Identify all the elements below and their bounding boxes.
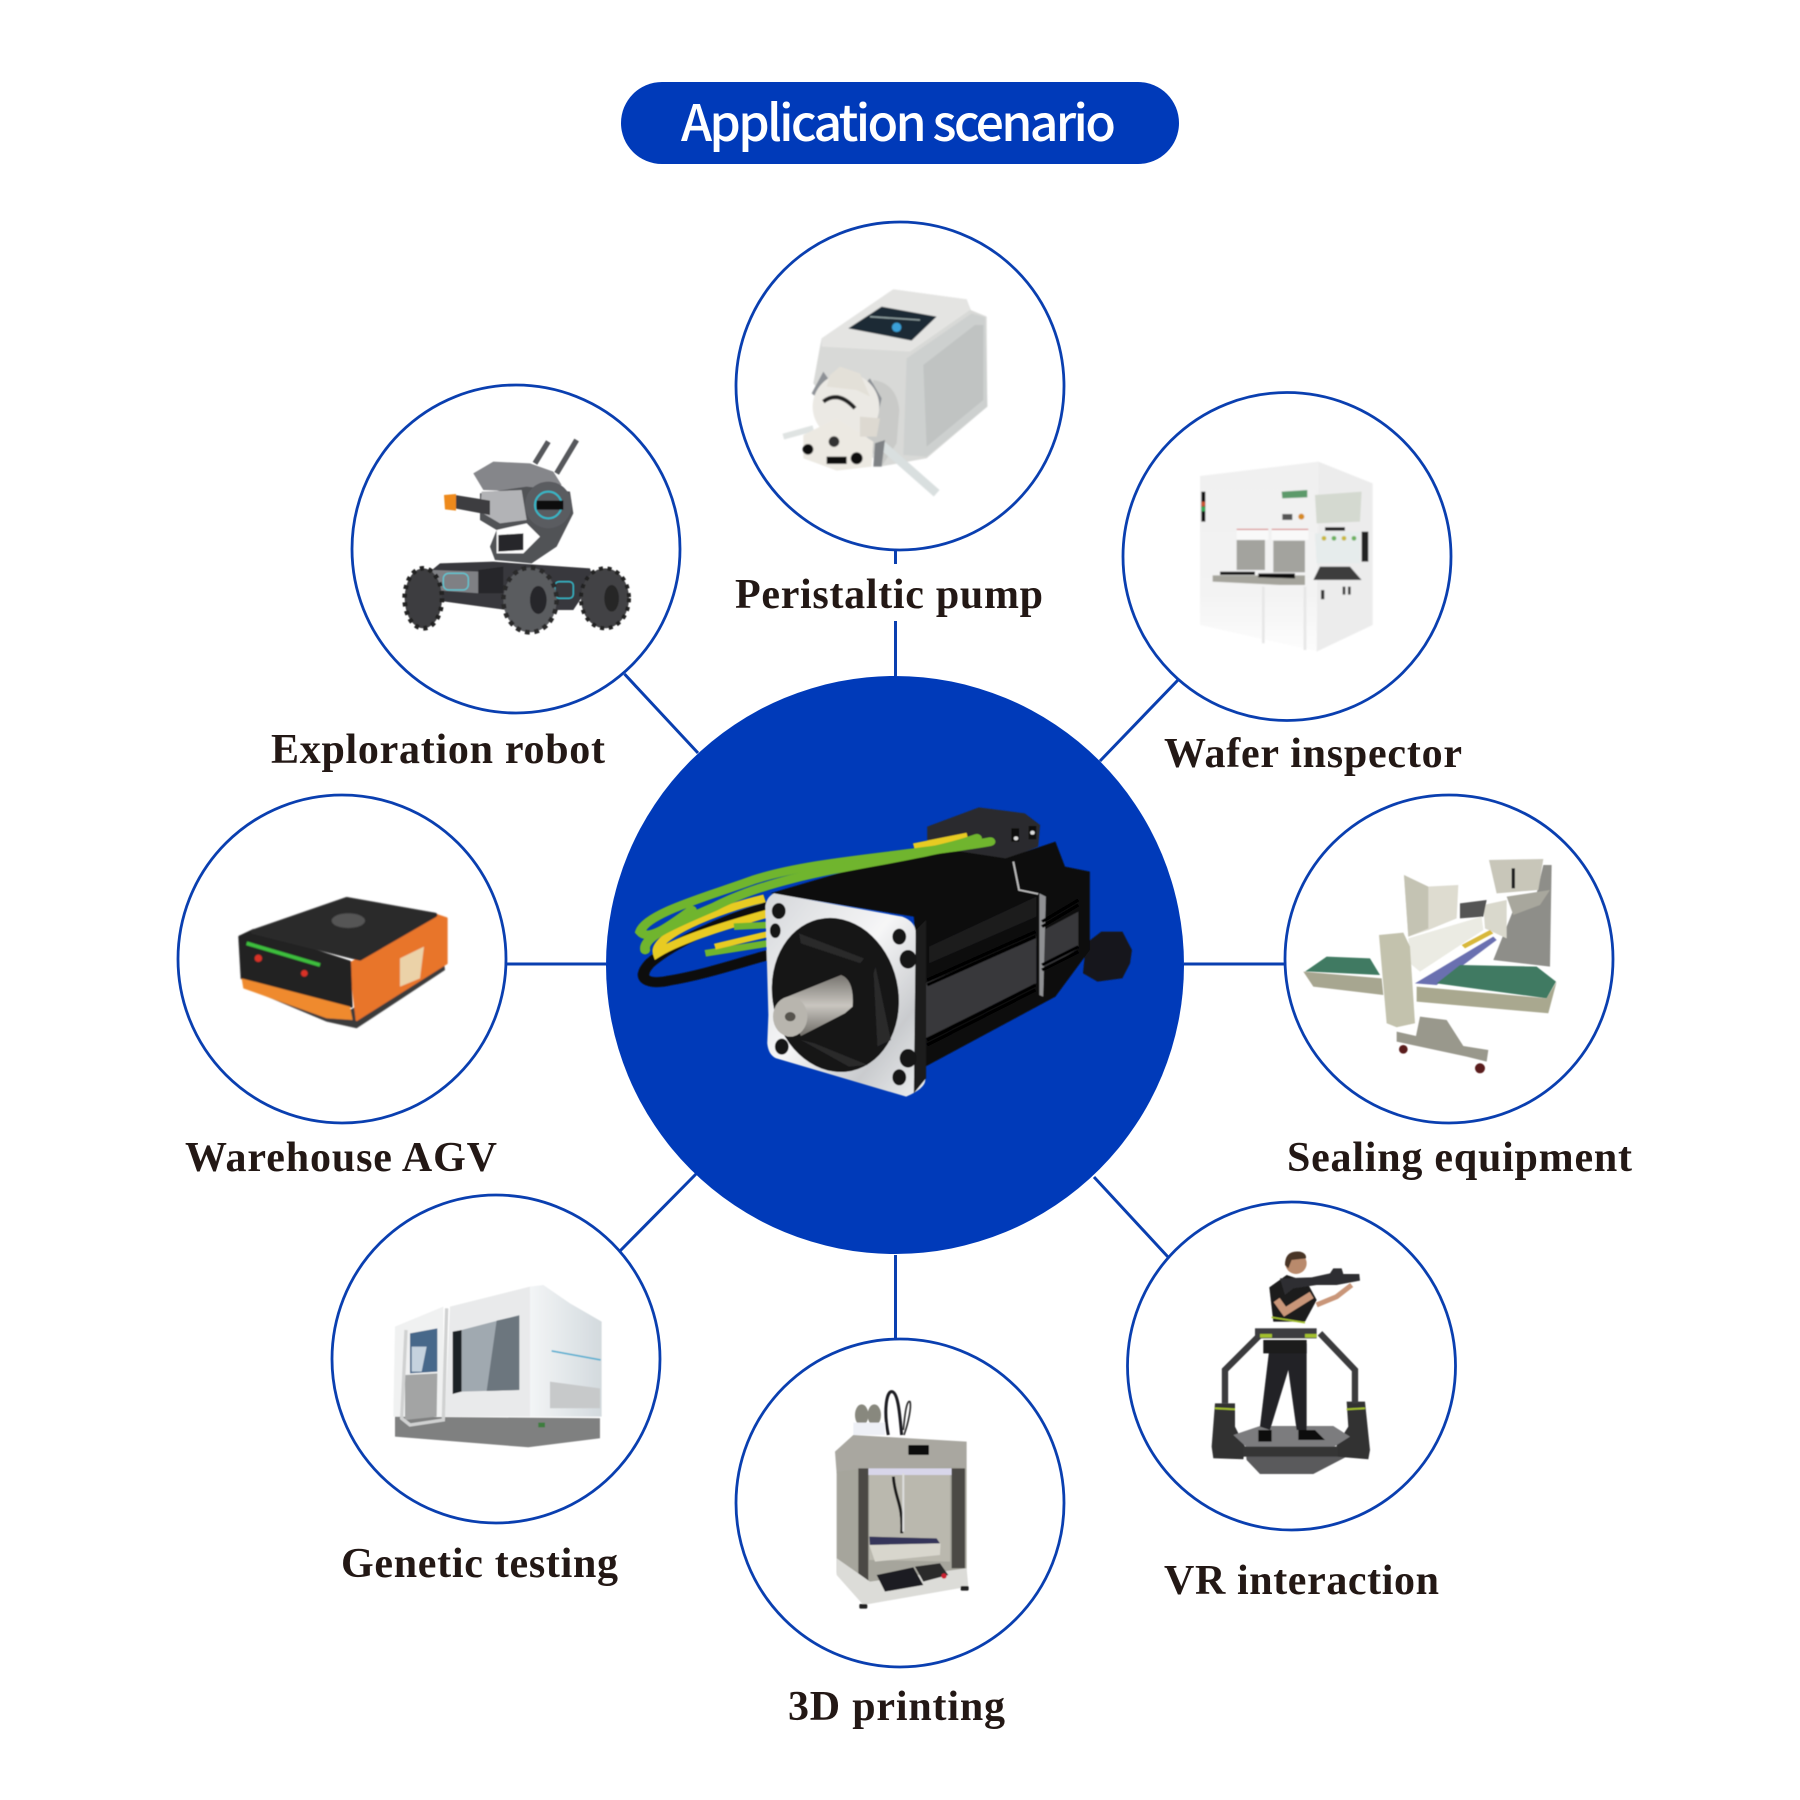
label: exploration robot: Exploration robot (271, 727, 605, 773)
connector block (927, 807, 1040, 860)
label: warehouse AGV: Warehouse AGV (185, 1135, 497, 1181)
icon: sequencer (393, 1285, 602, 1447)
connector lines (506, 549, 1284, 1339)
label: 3D printing: 3D printing (788, 1684, 1005, 1730)
circle: sealing equipment (1285, 795, 1613, 1123)
circle: exploration robot (352, 385, 680, 713)
title pill (621, 82, 1179, 164)
circle: warehouse AGV (178, 795, 506, 1123)
circle: 3D printing (736, 1339, 1064, 1667)
central motor disc (606, 676, 1184, 1254)
label: wafer inspector: Wafer inspector (1164, 731, 1462, 777)
label: sealing equipment: Sealing equipment (1287, 1135, 1632, 1181)
icon: AGV (239, 899, 447, 1028)
icon: pump (783, 289, 987, 493)
circle: peristaltic pump (736, 222, 1064, 550)
label: genetic testing: Genetic testing (341, 1541, 618, 1587)
flange holes (770, 903, 916, 1085)
label: VR interaction: VR interaction (1164, 1558, 1439, 1604)
circle: wafer inspector (1123, 392, 1451, 720)
motor rear connector (1083, 932, 1132, 982)
icon: wafer inspector (1200, 462, 1373, 652)
icon: robot (405, 440, 629, 632)
title pill: Application scenario (681, 84, 1116, 156)
motor illustration (640, 807, 1132, 1097)
icon: 3D printer (835, 1392, 969, 1609)
flange plate (765, 893, 925, 1097)
icon: sealing machine (1303, 859, 1557, 1073)
circle: VR interaction (1128, 1202, 1456, 1530)
circle: genetic testing (332, 1195, 660, 1523)
shaft (784, 975, 853, 1036)
icon: VR platform (1212, 1251, 1370, 1474)
motor body (770, 842, 1090, 1067)
label: peristaltic pump: Peristaltic pump (735, 572, 1043, 618)
wires (644, 907, 768, 982)
